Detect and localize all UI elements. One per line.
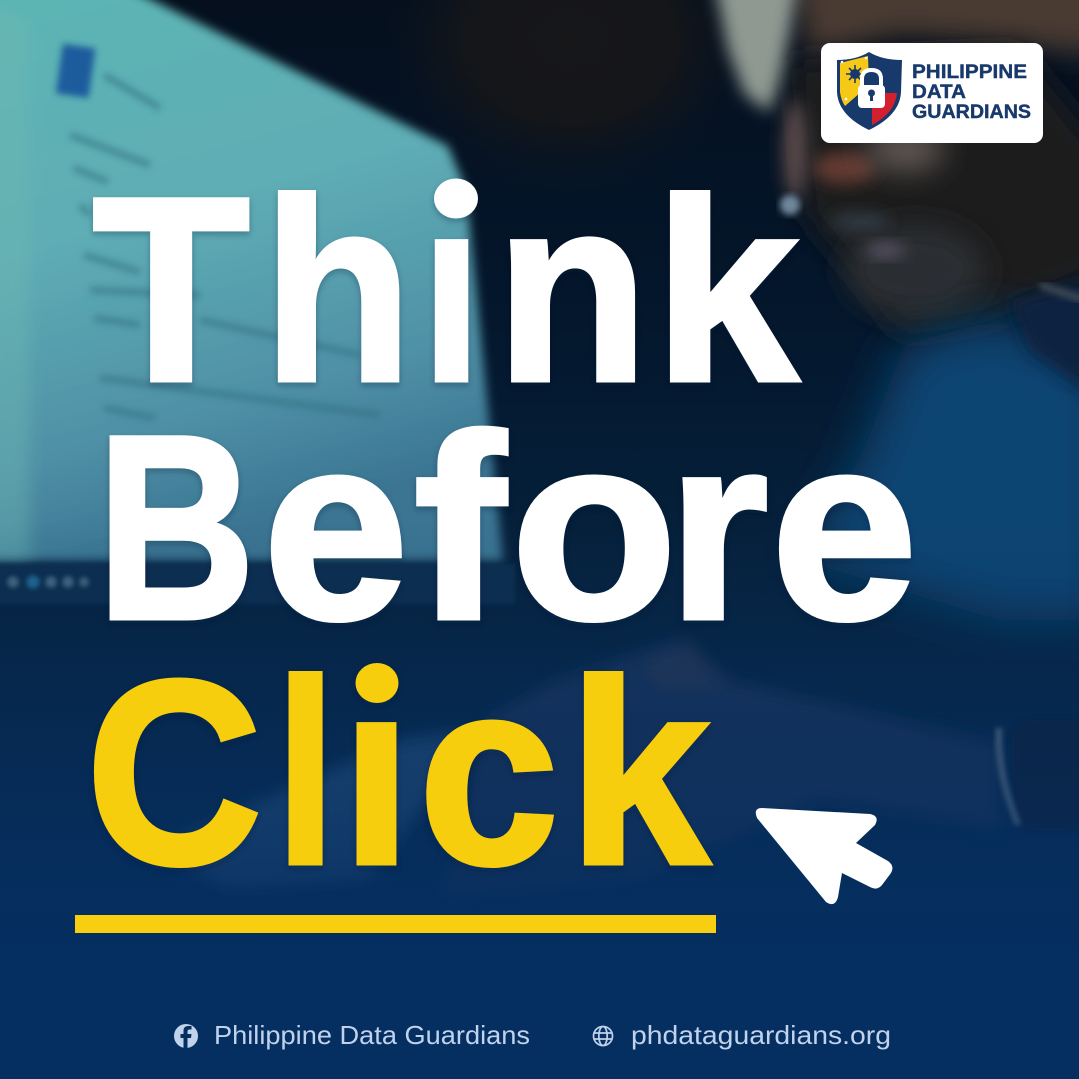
footer xyxy=(174,1020,891,1050)
footer text: facebook page: Philippine Data Guardians xyxy=(214,1020,530,1050)
title line: Think: i xyxy=(422,143,481,436)
person shirt xyxy=(800,318,1079,620)
title line: Click: c xyxy=(419,626,559,919)
navy fade overlay xyxy=(0,520,1079,1079)
logo wordmark xyxy=(912,62,1031,123)
title line: Before: o xyxy=(511,381,677,674)
title line: Think: n xyxy=(496,143,648,436)
person face xyxy=(783,0,1079,335)
title line: Think: h xyxy=(263,143,412,436)
monitor screen xyxy=(0,0,503,561)
icon: shield with padlock xyxy=(837,52,902,130)
laptop keyboard xyxy=(150,730,480,890)
title line: Click xyxy=(94,663,714,870)
person hands xyxy=(440,640,1000,900)
title line: Click: k xyxy=(569,626,711,919)
title line: Think: k xyxy=(654,143,800,436)
title line: Think xyxy=(90,178,803,388)
icon: cursor arrow xyxy=(756,808,892,904)
title line: Before: e xyxy=(771,381,917,674)
footer text: website: phdataguardians.org xyxy=(631,1020,891,1050)
title line: Before: B xyxy=(97,381,255,674)
logo wordmark: PHILIPPINE xyxy=(912,62,1027,83)
title line: Click: i xyxy=(341,626,412,919)
icon: facebook xyxy=(174,1024,198,1048)
title line: Click: C xyxy=(86,626,262,919)
logo wordmark: GUARDIANS xyxy=(912,102,1031,123)
icon: globe xyxy=(594,1026,612,1046)
title line: Before: r xyxy=(668,381,768,674)
logo wordmark: DATA xyxy=(912,82,966,103)
title line: Before: f xyxy=(414,381,508,674)
monitor taskbar xyxy=(0,564,515,604)
dark wall behind monitor xyxy=(380,0,760,190)
title xyxy=(90,178,912,870)
title line: Click: l xyxy=(275,626,336,919)
title line: Think: T xyxy=(93,143,250,436)
yellow underline xyxy=(75,915,716,933)
logo badge xyxy=(821,43,1043,143)
title line: Before xyxy=(107,426,912,623)
nose highlight xyxy=(780,195,800,215)
screen document content xyxy=(56,44,380,418)
title line: Before: e xyxy=(263,381,408,674)
wristwatch xyxy=(999,720,1079,830)
hair highlight xyxy=(712,0,800,112)
